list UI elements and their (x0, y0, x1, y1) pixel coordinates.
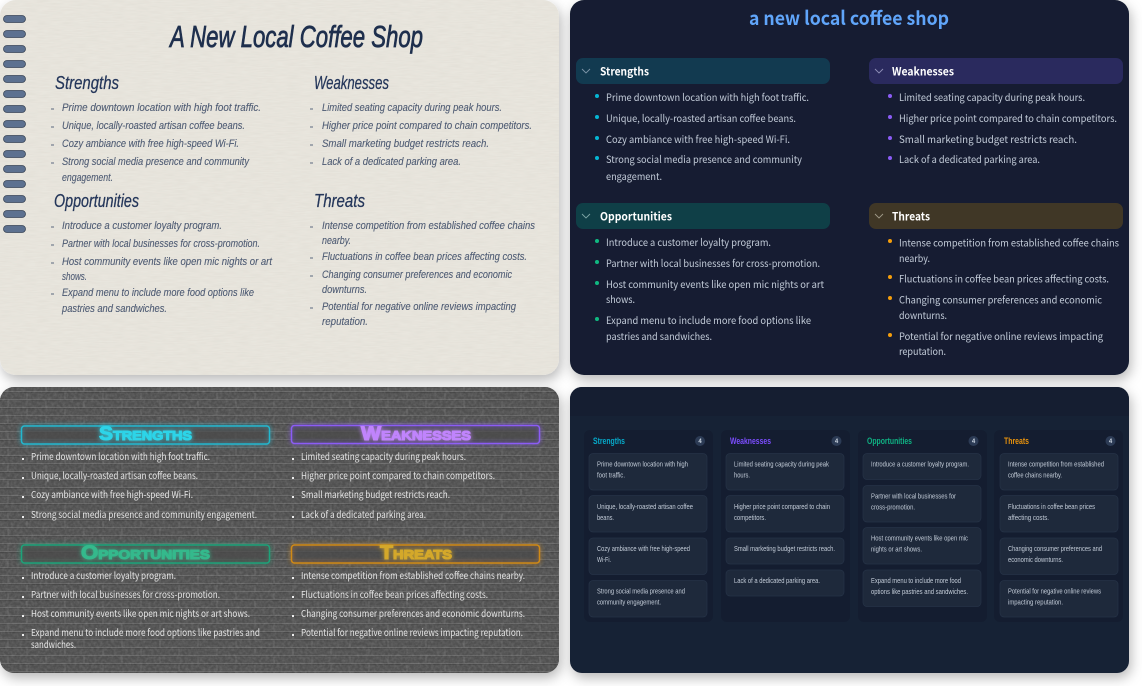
section: threats: nearby. (899, 250, 930, 265)
section: opportunities: Expand menu to include more food options like pastries and (31, 625, 260, 639)
section: opportunities: Host community events like open mic nights or art (62, 256, 273, 268)
panel: kanban board SWOT (570, 387, 1129, 673)
section: weaknesses: Higher price point compared to chain competitors. (301, 468, 495, 482)
section: threats: Intense competition from established coffee chains nearby. (301, 568, 525, 582)
section: threats: Fluctuations in coffee bean prices affecting costs. (322, 251, 527, 263)
section: weaknesses: Higher price point compared to chain competitors. (899, 110, 1117, 125)
section: opportunities: Host community events like open mic nights or art shows. (31, 606, 250, 620)
section: opportunities: Expand menu to include more food options like (606, 312, 811, 327)
column: weaknesses: Limited seating capacity during peak (734, 460, 829, 468)
section: strengths: engagement. (62, 172, 113, 184)
section: strengths: Cozy ambiance with free high-speed Wi-Fi. (31, 487, 193, 501)
section: opportunities: shows. (62, 271, 87, 283)
column: opportunities: Expand menu to include more food (871, 576, 961, 585)
section: weaknesses: Small marketing budget restricts reach. (322, 138, 489, 150)
section: threats (292, 543, 540, 639)
section: weaknesses: Limited seating capacity during peak hours. (301, 449, 466, 463)
column: strengths: 4 (698, 439, 702, 445)
section: threats: Intense competition from established coffee chains (899, 234, 1119, 250)
column: opportunities (858, 430, 987, 622)
column: weaknesses: 4 (835, 439, 839, 445)
column: opportunities: options like pastries and sandwiches. (871, 587, 968, 596)
column: strengths: Prime downtown location with high (597, 460, 688, 468)
section: threats: Threats (892, 208, 931, 224)
section: strengths: Unique, locally-roasted artisan coffee beans. (31, 468, 198, 482)
section: strengths (51, 73, 261, 184)
section: opportunities: Opportunities (54, 191, 139, 211)
section: strengths: Strengths (99, 424, 192, 445)
section: opportunities: Host community events like open mic nights or art (606, 276, 824, 291)
section: threats (310, 191, 535, 328)
section: threats: Changing consumer preferences and economic (899, 292, 1102, 306)
section: strengths: Prime downtown location with high foot traffic. (606, 89, 809, 104)
section: threats: reputation. (322, 316, 368, 328)
section: opportunities: Partner with local businesses for cross-promotion. (31, 587, 220, 601)
section: weaknesses (869, 58, 1123, 166)
section: opportunities: pastries and sandwiches. (606, 328, 712, 343)
column: threats: coffee chains nearby. (1008, 470, 1062, 480)
section: weaknesses: Small marketing budget restricts reach. (899, 131, 1077, 146)
section: threats: nearby. (322, 235, 351, 247)
section: strengths (22, 424, 270, 521)
section: threats: Potential for negative online reviews impacting (899, 328, 1103, 343)
column: opportunities: nights or art shows. (871, 544, 922, 554)
column: opportunities: cross-promotion. (871, 502, 915, 512)
section: opportunities: shows. (606, 291, 635, 306)
section: threats: Threats (314, 191, 365, 211)
section: weaknesses: Higher price point compared to chain competitors. (322, 120, 532, 132)
icon: notebook spiral binding (4, 16, 26, 232)
section: strengths: Strong social media presence and community engagement. (31, 507, 257, 521)
section: weaknesses: Small marketing budget restricts reach. (301, 487, 450, 501)
section: opportunities (22, 543, 270, 651)
section: opportunities: Opportunities (81, 543, 210, 564)
section: strengths: Prime downtown location with high foot traffic. (62, 102, 261, 114)
section: threats: reputation. (899, 343, 946, 358)
column: strengths: beans. (597, 513, 614, 522)
title: A New Local Coffee Shop (169, 19, 423, 54)
section: strengths: Strengths (55, 73, 119, 93)
title: a new local coffee shop (749, 4, 949, 31)
section: threats: Threats (380, 543, 452, 564)
section: strengths: Cozy ambiance with free high-speed Wi-Fi. (606, 131, 790, 146)
section: strengths (576, 58, 830, 183)
column: opportunities: 4 (972, 439, 976, 445)
section: strengths: Prime downtown location with high foot traffic. (31, 449, 210, 463)
section: threats: Fluctuations in coffee bean prices affecting costs. (899, 270, 1109, 286)
column: opportunities: Opportunities (867, 436, 912, 446)
panel: dark accordion SWOT (570, 0, 1129, 375)
column: strengths: Wi-Fi. (597, 555, 611, 564)
column: weaknesses: Lack of a dedicated parking area. (734, 576, 820, 585)
section: threats: Potential for negative online reviews impacting (322, 301, 517, 313)
column: weaknesses: Small marketing budget restricts reach. (734, 544, 835, 553)
section: threats: downturns. (322, 284, 367, 296)
section: opportunities: Partner with local businesses for cross-promotion. (62, 238, 260, 250)
section: weaknesses: Lack of a dedicated parking area. (301, 507, 426, 521)
column: weaknesses: Higher price point compared to chain (734, 502, 830, 511)
column: threats: Changing consumer preferences and (1008, 544, 1102, 553)
column: threats: 4 (1109, 439, 1113, 445)
panel: notebook style SWOT (0, 0, 559, 375)
column: weaknesses: competitors. (734, 513, 766, 522)
column: weaknesses (721, 430, 850, 622)
section: strengths: Unique, locally-roasted artisan coffee beans. (62, 120, 245, 132)
section: strengths: Cozy ambiance with free high-speed Wi-Fi. (62, 138, 239, 150)
section: opportunities: Introduce a customer loyalty program. (31, 568, 176, 582)
column: strengths: Cozy ambiance with free high-speed (597, 544, 690, 553)
column: weaknesses: Weaknesses (730, 436, 771, 446)
column: threats: Intense competition from established (1008, 460, 1104, 468)
section: weaknesses: Weaknesses (892, 64, 955, 80)
section: strengths: Unique, locally-roasted artisan coffee beans. (606, 110, 796, 125)
section: threats: Fluctuations in coffee bean prices affecting costs. (301, 587, 488, 601)
section: threats: Potential for negative online reviews impacting reputation. (301, 625, 523, 639)
section: opportunities (51, 191, 273, 315)
section: weaknesses (292, 424, 540, 521)
column: strengths: Strengths (593, 436, 625, 446)
section: strengths: Strong social media presence and community (62, 156, 250, 168)
section: strengths: Strengths (600, 64, 650, 80)
column: threats: impacting reputation. (1008, 598, 1063, 606)
column: strengths: foot traffic. (597, 470, 625, 480)
column: threats: economic downturns. (1008, 555, 1063, 564)
section: opportunities: Introduce a customer loyalty program. (62, 220, 222, 232)
section: weaknesses: Lack of a dedicated parking area. (322, 156, 461, 168)
section: weaknesses: Weaknesses (361, 424, 471, 445)
section: weaknesses: Weaknesses (314, 73, 389, 93)
panel: neon brick wall SWOT (0, 387, 559, 673)
section: opportunities: Partner with local businesses for cross-promotion. (606, 255, 820, 270)
section: threats: Changing consumer preferences and economic (322, 269, 512, 281)
section: weaknesses: Limited seating capacity during peak hours. (322, 102, 502, 114)
column: threats: Fluctuations in coffee bean prices (1008, 502, 1095, 511)
column: threats: Threats (1004, 436, 1029, 446)
section: opportunities: sandwiches. (31, 637, 76, 651)
section: strengths: engagement. (606, 168, 662, 183)
column: threats (994, 430, 1123, 622)
column: strengths: Unique, locally-roasted artisan coffee (597, 502, 693, 511)
section: strengths: Strong social media presence and community (606, 151, 803, 166)
section: threats (869, 203, 1123, 358)
column: strengths: community engagement. (597, 598, 661, 606)
column: threats: affecting costs. (1008, 513, 1049, 522)
column: strengths (584, 430, 713, 622)
column: weaknesses: hours. (734, 470, 750, 480)
column: threats: Potential for negative online reviews (1008, 586, 1101, 596)
section: weaknesses (310, 73, 532, 168)
section: opportunities: Opportunities (600, 208, 673, 224)
section: opportunities: pastries and sandwiches. (61, 303, 167, 315)
section: threats: downturns. (899, 307, 947, 322)
column: opportunities: Introduce a customer loyalty program. (871, 460, 969, 468)
column: opportunities: Partner with local businesses for (871, 492, 956, 500)
section: opportunities: Expand menu to include more food options like (62, 287, 254, 299)
section: threats: Changing consumer preferences and economic downturns. (301, 606, 525, 620)
column: strengths: Strong social media presence and (597, 586, 685, 596)
section: weaknesses: Lack of a dedicated parking area. (899, 151, 1040, 166)
section: opportunities (576, 203, 830, 343)
section: opportunities: Introduce a customer loyalty program. (606, 234, 771, 249)
column: opportunities: Host community events like open mic (871, 534, 968, 542)
section: threats: Intense competition from established coffee chains (322, 220, 535, 232)
section: weaknesses: Limited seating capacity during peak hours. (899, 89, 1085, 104)
